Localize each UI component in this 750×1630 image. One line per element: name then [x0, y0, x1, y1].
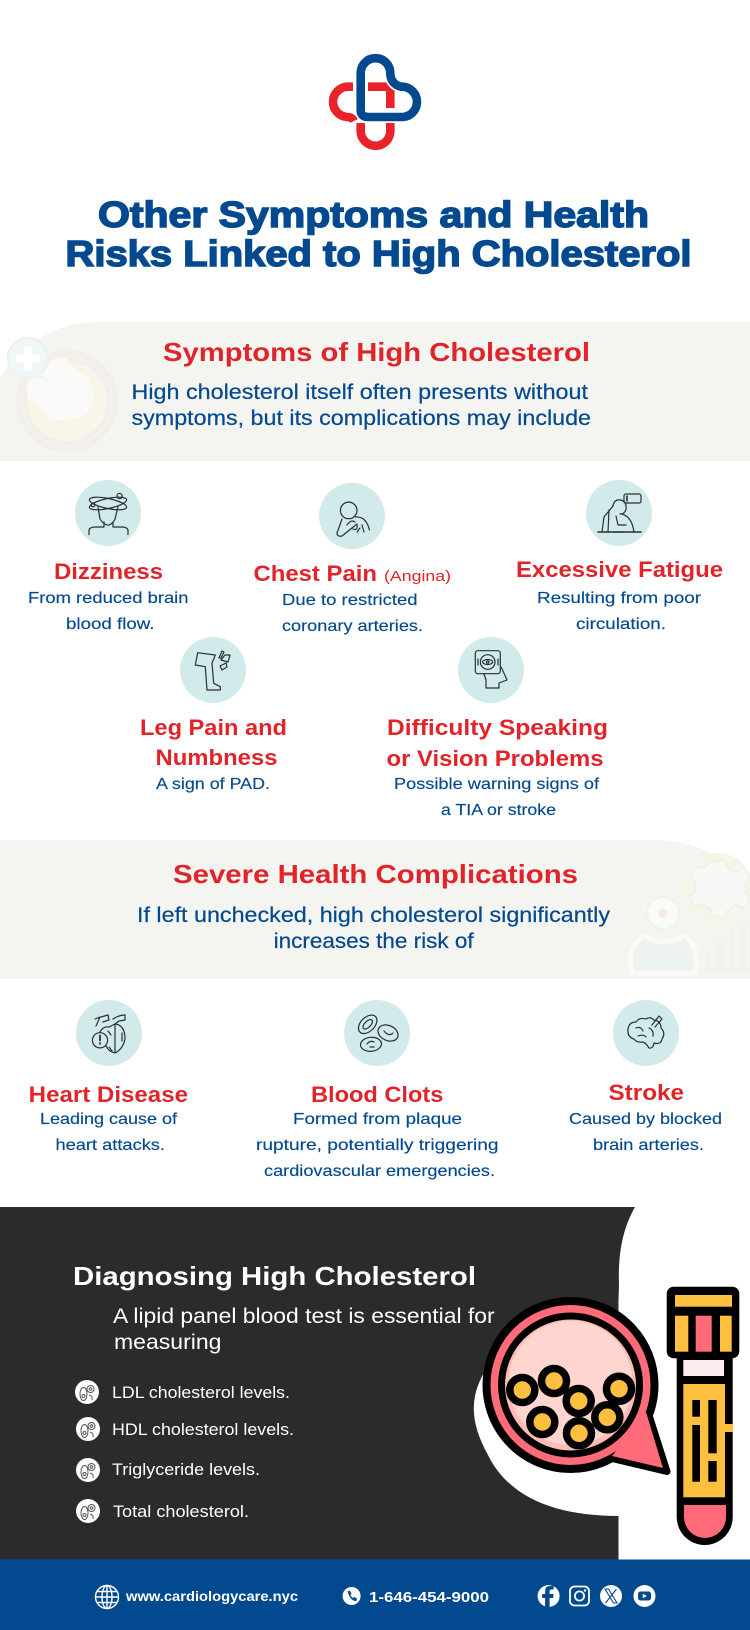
text: stroke detail — [569, 1111, 722, 1154]
symptom: dizziness — [28, 480, 188, 633]
icon: globe — [96, 1586, 118, 1608]
text: leg pain detail: A sign of PAD. — [156, 776, 270, 793]
panel: severe complications intro — [0, 840, 750, 979]
illustration: blood test tube — [667, 1287, 739, 1545]
icon: leg with pain sparks — [195, 651, 230, 690]
symptom: excessive fatigue — [516, 480, 723, 633]
text: chest pain detail: Due to restricted — [282, 592, 418, 609]
heading: heart disease: Heart Disease — [29, 1082, 188, 1107]
text: dizziness detail: blood flow. — [66, 616, 154, 633]
text: blood clots detail: rupture, potentially triggering — [256, 1137, 498, 1154]
heading: diagnosing: Diagnosing High Cholesterol — [73, 1261, 476, 1291]
text: speaking detail: Possible warning signs of — [394, 776, 600, 793]
icon: dizzy head — [88, 493, 128, 535]
icon: head with eye — [475, 651, 507, 688]
text: dizziness detail: From reduced brain — [28, 590, 188, 607]
text: lipid panel intro: measuring — [114, 1331, 222, 1354]
heading: leg pain: Leg Pain and — [140, 715, 287, 740]
text: symptoms intro: High cholesterol itself often presents without — [132, 381, 588, 404]
text: chest pain detail — [282, 592, 423, 635]
list item: total cholesterol: Total cholesterol. — [113, 1502, 249, 1521]
panel: symptoms intro — [0, 322, 750, 461]
text: blood clots detail: cardiovascular emergencies. — [264, 1163, 495, 1180]
text: fatigue detail: circulation. — [576, 616, 666, 633]
title: Other Symptoms and Health — [98, 194, 649, 235]
complication: stroke — [569, 1000, 722, 1154]
text: stroke detail: Caused by blocked — [569, 1111, 722, 1128]
title — [66, 194, 692, 274]
heading: severe complications: Severe Health Complications — [173, 859, 578, 889]
icon: tired person with low battery — [598, 494, 641, 532]
text: fatigue detail — [537, 590, 702, 633]
text: fatigue detail: Resulting from poor — [537, 590, 702, 607]
illustration: magnified blood cells — [486, 1301, 667, 1472]
icon: brain — [628, 1016, 664, 1048]
text: speaking detail — [394, 776, 600, 819]
text: symptoms intro: symptoms, but its complications may include — [132, 407, 591, 430]
list item: LDL — [75, 1380, 290, 1404]
icon: person holding chest — [337, 502, 370, 536]
list item: LDL: LDL cholesterol levels. — [112, 1383, 290, 1402]
text: lipid panel intro — [113, 1305, 495, 1354]
icon: facebook — [538, 1585, 560, 1607]
symptom: leg pain — [140, 637, 287, 793]
icon: instagram — [570, 1586, 589, 1606]
icon: youtube — [634, 1585, 656, 1607]
heading: difficulty speaking or vision problems: Difficulty Speaking — [387, 715, 608, 740]
complication: heart disease — [29, 1000, 188, 1154]
text: chest pain detail: coronary arteries. — [282, 618, 423, 635]
complication: blood clots — [256, 1000, 498, 1180]
text: complications intro: If left unchecked, high cholesterol significantly — [137, 904, 611, 927]
heading: difficulty speaking or vision problems: or Vision Problems — [386, 746, 604, 771]
heading: chest pain: (Angina) — [384, 568, 451, 585]
text: dizziness detail — [28, 590, 188, 633]
symptom: difficulty speaking or vision problems — [386, 637, 608, 819]
heading: chest pain — [254, 561, 451, 586]
text: speaking detail: a TIA or stroke — [441, 802, 556, 819]
list item: HDL: HDL cholesterol levels. — [112, 1420, 294, 1439]
heading: blood clots: Blood Clots — [311, 1082, 443, 1107]
heading: dizziness: Dizziness — [54, 559, 163, 584]
heading: difficulty speaking or vision problems — [386, 715, 608, 771]
panel: diagnosing high cholesterol — [0, 1207, 635, 1560]
list item: total cholesterol — [76, 1499, 249, 1523]
text: blood clots detail: Formed from plaque — [293, 1111, 462, 1128]
title: Risks Linked to High Cholesterol — [66, 233, 692, 274]
text: heart disease detail: heart attacks. — [56, 1137, 165, 1154]
icon: x — [600, 1585, 622, 1607]
text: heart disease detail: Leading cause of — [40, 1111, 178, 1128]
text: blood clots detail — [256, 1111, 498, 1180]
heading: stroke: Stroke — [608, 1080, 684, 1105]
website: www.cardiologycare.nyc — [125, 1588, 298, 1604]
list item: triglycerides — [76, 1458, 260, 1482]
watermark: artery illustration — [8, 338, 118, 452]
text: lipid panel intro: A lipid panel blood test is essential for — [113, 1305, 495, 1328]
heading: symptoms: Symptoms of High Cholesterol — [163, 337, 590, 367]
icon: blood cells — [355, 1012, 401, 1052]
text: heart disease detail — [40, 1111, 178, 1154]
icon: phone — [343, 1587, 361, 1605]
heading: leg pain — [140, 715, 287, 770]
list item: triglycerides: Triglyceride levels. — [112, 1460, 260, 1479]
symptom: chest pain — [254, 483, 451, 635]
text: symptoms intro — [132, 381, 591, 430]
text: stroke detail: brain arteries. — [593, 1137, 704, 1154]
text: complications intro: increases the risk of — [274, 930, 474, 953]
text: complications intro — [137, 904, 611, 953]
watermark: person with gear — [631, 853, 750, 973]
list item: HDL — [76, 1417, 294, 1441]
heading: leg pain: Numbness — [156, 745, 278, 770]
icon: heart with alert — [92, 1015, 125, 1053]
heading: excessive fatigue: Excessive Fatigue — [516, 557, 723, 582]
footer — [0, 1560, 750, 1630]
phone number: 1-646-454-9000 — [369, 1589, 489, 1606]
logo — [333, 58, 417, 146]
heading: chest pain: Chest Pain — [254, 561, 377, 586]
